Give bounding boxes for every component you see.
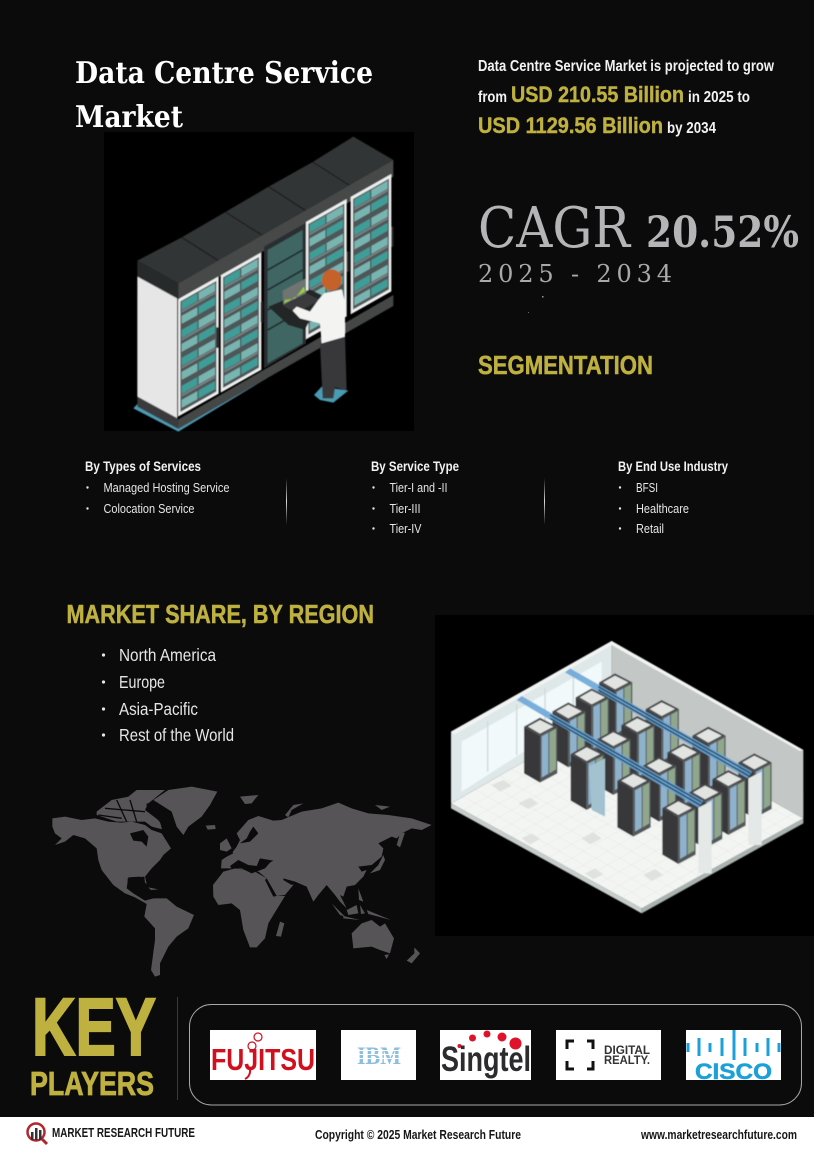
world map xyxy=(52,787,432,977)
market projection text: USD 210.55 Billion xyxy=(511,82,684,107)
segment: by types of services: By Types of Services xyxy=(85,458,201,474)
title: Data Centre Service xyxy=(75,56,373,91)
segment: by service type: Tier-I and -II xyxy=(390,481,448,495)
logo: Digital Realty: REALTY. xyxy=(604,1053,650,1067)
region list: Rest of the World xyxy=(119,725,234,745)
footer xyxy=(0,1117,814,1150)
market projection text xyxy=(478,58,775,138)
region list: Asia-Pacific xyxy=(119,699,198,719)
CAGR figure: 2025 - 2034 xyxy=(478,260,672,288)
segment: by service type: Tier-IV xyxy=(390,522,422,536)
CAGR figure: CAGR xyxy=(478,196,632,261)
segment: by end use industry: By End Use Industry xyxy=(618,458,728,474)
segment: by end use industry xyxy=(618,458,728,536)
icon: market research future logo xyxy=(28,1124,47,1144)
logo: Singtel: Singtel xyxy=(441,1040,531,1079)
footer: Copyright © 2025 Market Research Future xyxy=(315,1127,521,1142)
title xyxy=(75,56,373,135)
segment: by end use industry: BFSI xyxy=(636,481,658,495)
market projection text: from xyxy=(478,89,507,106)
heading: market share by region: MARKET SHARE, BY REGION xyxy=(66,599,374,629)
region list: North America xyxy=(119,645,216,665)
segment: by service type: By Service Type xyxy=(371,458,459,474)
logo: Cisco xyxy=(686,1030,781,1084)
region list xyxy=(102,645,234,745)
segment: by end use industry: Healthcare xyxy=(636,502,689,516)
footer: MARKET RESEARCH FUTURE xyxy=(52,1125,195,1140)
logo: Cisco: CISCO xyxy=(695,1059,772,1084)
logo: Fujitsu: FUJITSU xyxy=(211,1042,315,1077)
logo: Digital Realty: DIGITAL xyxy=(604,1043,650,1057)
logo: Digital Realty xyxy=(556,1030,661,1080)
illustration: server racks with technician xyxy=(104,132,414,432)
region list: Europe xyxy=(119,672,165,692)
icon: keyboard shelf and laptop xyxy=(268,278,322,330)
logo: Fujitsu xyxy=(210,1030,316,1080)
segment: by service type xyxy=(371,458,459,536)
logo: Singtel xyxy=(440,1030,531,1080)
heading: key players: PLAYERS xyxy=(30,1065,154,1102)
icon: technician xyxy=(293,269,348,403)
title: Market xyxy=(75,100,183,135)
heading: segmentation: SEGMENTATION xyxy=(478,350,653,380)
market projection text: USD 1129.56 Billion xyxy=(478,113,663,138)
segment: by end use industry: Retail xyxy=(636,522,664,536)
segment: by service type: Tier-III xyxy=(390,502,420,516)
illustration: data centre room xyxy=(435,615,814,936)
market projection text: by 2034 xyxy=(667,120,716,137)
heading: key players xyxy=(30,982,156,1102)
logo: IBM: IBM xyxy=(357,1043,401,1070)
market projection text: in 2025 to xyxy=(688,89,750,106)
panel: key player logos xyxy=(190,1004,802,1105)
CAGR figure xyxy=(478,196,799,288)
heading: key players: KEY xyxy=(32,982,156,1073)
segment: by types of services: Managed Hosting Service xyxy=(104,481,230,495)
segment: by types of services xyxy=(85,458,230,516)
segment: by types of services: Colocation Service xyxy=(104,502,195,516)
logo: IBM xyxy=(341,1030,416,1080)
